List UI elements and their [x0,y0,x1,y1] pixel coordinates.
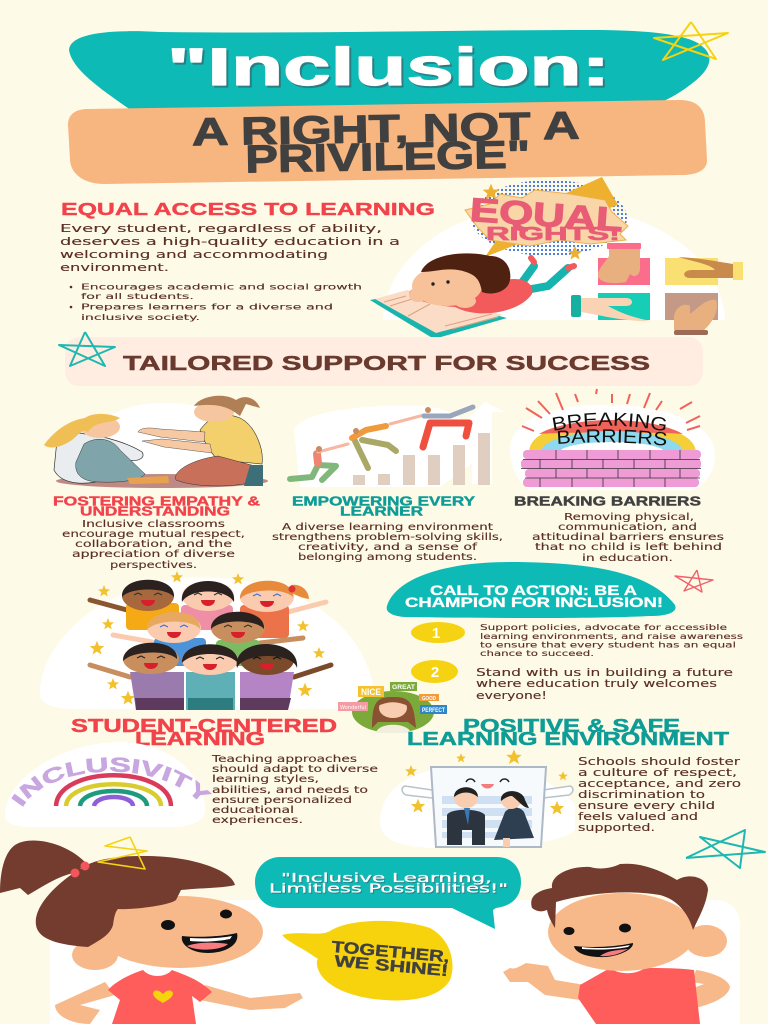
call to action heading: CHAMPION FOR INCLUSION! [405,594,663,610]
illustration: climbers on rising bars [290,402,505,487]
heading: POSITIVE & SAFE [463,716,680,736]
heading: BREAKING BARRIERS [514,494,701,508]
body text: supported. [578,822,655,834]
subtitle text: A RIGHT, NOT A [191,105,580,154]
step 1 badge: 1 [432,625,440,642]
heading: EQUAL ACCESS TO LEARNING [61,199,435,219]
illustration: group of happy children [40,571,373,710]
paragraph [60,223,400,274]
step 1 text [480,622,743,658]
puzzle piece: pink with hand [598,243,650,285]
body text: feels valued and [578,811,698,823]
heading [53,494,260,518]
body text: Schools should foster [578,756,741,768]
yellow speech bubble [282,921,453,1000]
body text: appreciation of diverse [72,549,235,560]
heading: EMPOWERING EVERY [292,494,475,508]
body text: Removing physical, [564,512,694,523]
gold stars [90,571,325,704]
heading: STUDENT-CENTERED [71,716,337,736]
body text: in education. [582,553,673,564]
body text [272,522,503,563]
paragraph: deserves a high-quality education in a [60,236,400,248]
body text [211,754,378,826]
back row children [90,580,326,638]
boy arms [503,963,730,1012]
teal speech bubble: Limitless Possibilities!" [269,880,508,896]
open book [370,290,507,339]
icon: woman with praise bubbles: PERFECT [422,708,445,714]
body text: should adapt to diverse [212,764,378,775]
body text: Inclusive classrooms [82,519,225,530]
step 1 text: learning environments, and raise awareness [480,631,743,641]
girl character [0,840,303,1024]
title banner [69,22,728,118]
girl eyes [161,910,232,930]
bullet list [70,282,362,322]
subtitle text [191,105,581,182]
step 1 badge [411,622,465,643]
step 2 badge: 2 [431,664,439,681]
step 1 text: to ensure that every student has an equal [480,640,736,650]
call to action heading [405,582,663,610]
teal speech bubble: "Inclusive Learning, [281,870,492,885]
boy body [409,279,533,313]
bullet list: for all students. [81,291,194,301]
illustration: rainbow over brick wall [510,388,715,490]
step 2 text [476,667,733,702]
equal rights badge: EQUAL [469,191,624,238]
equal rights badge: RIGHTS! [486,224,620,244]
step 2 text: everyone! [476,690,547,702]
boy head [409,253,510,308]
middle row children [113,612,303,666]
body text: collaboration, and the [75,539,232,550]
heading: LEARNING [135,729,265,749]
body text: experiences. [212,815,303,826]
icon: woman with praise bubbles: GREAT [392,684,415,691]
teal scribble star lower right [686,830,765,868]
subtitle text: PRIVILEGE" [245,133,531,181]
girl ear [72,940,118,970]
body text: belonging among students. [298,552,477,563]
girl mouth [182,933,237,953]
teal title blob [69,30,709,118]
body text [578,756,741,834]
section band: tailored support for success [65,337,703,386]
step 2 text: Stand with us in building a future [476,667,733,679]
heading: UNDERSTANDING [80,504,230,518]
inclusivity rainbow illustration: INCLUSIVITY [11,757,212,807]
red scribble star [675,570,713,592]
body text: educational [212,805,294,816]
yellow speech bubble: WE SHINE! [334,953,449,980]
body text: discrimination to [578,789,705,801]
heading [71,716,337,749]
illustration: boy reading, equal rights badge and puzzle hands [370,177,743,339]
subtitle banner [68,100,707,184]
body text: encourage mutual respect, [62,529,245,540]
body text [62,519,245,571]
panel: breaking barriers [510,388,724,564]
step 2 badge [411,660,458,683]
band heading: TAILORED SUPPORT FOR SUCCESS [123,352,650,375]
boy character [503,864,730,1024]
white backdrop [40,577,373,709]
panel: student-centered learning [5,716,378,827]
white backdrop [50,900,740,1024]
teal heading blob [387,562,676,618]
body text: attitudinal barriers ensures [532,532,724,543]
puzzle piece: yellow with hand [665,257,743,285]
inclusivity rainbow illustration [5,742,212,827]
body text: ensure personalized [212,795,352,806]
step 1 text: Support policies, advocate for accessible [480,622,727,632]
front row children [90,643,331,710]
panel: fostering empathy [44,396,268,571]
bullet list: inclusive society. [81,312,200,322]
bottom scene [0,837,740,1024]
body text: strengthens problem-solving skills, [272,532,503,543]
teal scribble star [59,332,115,366]
heading [407,716,729,749]
paragraph: Every student, regardless of ability, [60,223,382,235]
body text: acceptance, and zero [578,778,741,790]
girl face [97,896,263,968]
body text: learning styles, [212,774,319,785]
body text: A diverse learning environment [282,522,494,533]
step 1 text: chance to succeed. [480,648,594,658]
teal speech bubble [255,857,521,929]
illustration: rainbow over brick wall: BREAKING [552,412,666,431]
body text [532,512,724,564]
boy mouth [574,943,633,957]
body text: that no child is left behind [535,542,722,553]
illustration: two children [44,396,268,488]
call to action heading: CALL TO ACTION: BE A [430,582,637,598]
girl shirt [108,970,212,1024]
title text: "Inclusion: [167,38,610,97]
girl hair [36,856,235,947]
hair ties [70,862,90,878]
body text: a culture of respect, [578,767,737,779]
paragraph: welcoming and accommodating [60,249,328,261]
white backdrop [383,205,725,320]
boy shirt [578,968,700,1024]
body text: Teaching approaches [211,754,357,765]
panel: call to action [387,562,743,702]
body text: creativity, and a sense of [298,542,478,553]
heading: LEARNER [340,504,424,518]
bullet list: Encourages academic and social growth [81,282,362,292]
school building illustration [380,749,575,848]
equal rights badge [465,177,628,259]
heart on shirt [153,990,173,1003]
body text: communication, and [558,522,697,533]
body text: perspectives. [110,560,197,571]
girl arms [55,982,303,1024]
panel: positive and safe learning environment [380,716,741,848]
step 2 text: where education truly welcomes [476,678,717,690]
body text: abilities, and needs to [212,785,368,796]
band background [65,337,703,386]
heading [292,494,475,518]
girl ponytail [0,840,85,895]
boy face [548,893,696,971]
icon: woman with praise bubbles: NICE [361,687,381,697]
icon: woman with praise bubbles: GOOD [422,696,436,702]
panel: empowering every learner [272,402,505,563]
yellow scribble star on girl [98,837,147,869]
section: equal access to learning [60,199,435,322]
boy legs [518,258,574,290]
paragraph: environment. [60,262,169,274]
body text: ensure every child [578,800,715,812]
boy hair [531,864,708,930]
icon: woman with praise bubbles [338,682,447,733]
yellow scribble star [654,22,728,60]
peach subtitle shape [68,100,707,184]
puzzle piece: teal with hand [571,293,650,321]
boy eyes [564,924,631,935]
puzzle piece: tan with hand [665,293,718,335]
heading: FOSTERING EMPATHY & [53,494,260,508]
heading: LEARNING ENVIRONMENT [407,729,729,749]
icon: woman with praise bubbles: Wonderful [340,705,366,711]
boy ear [685,925,727,957]
illustration: rainbow over brick wall: BARRIERS [558,429,666,446]
bullet list: Prepares learners for a diverse and [81,302,333,312]
yellow speech bubble: TOGETHER, [331,939,450,966]
